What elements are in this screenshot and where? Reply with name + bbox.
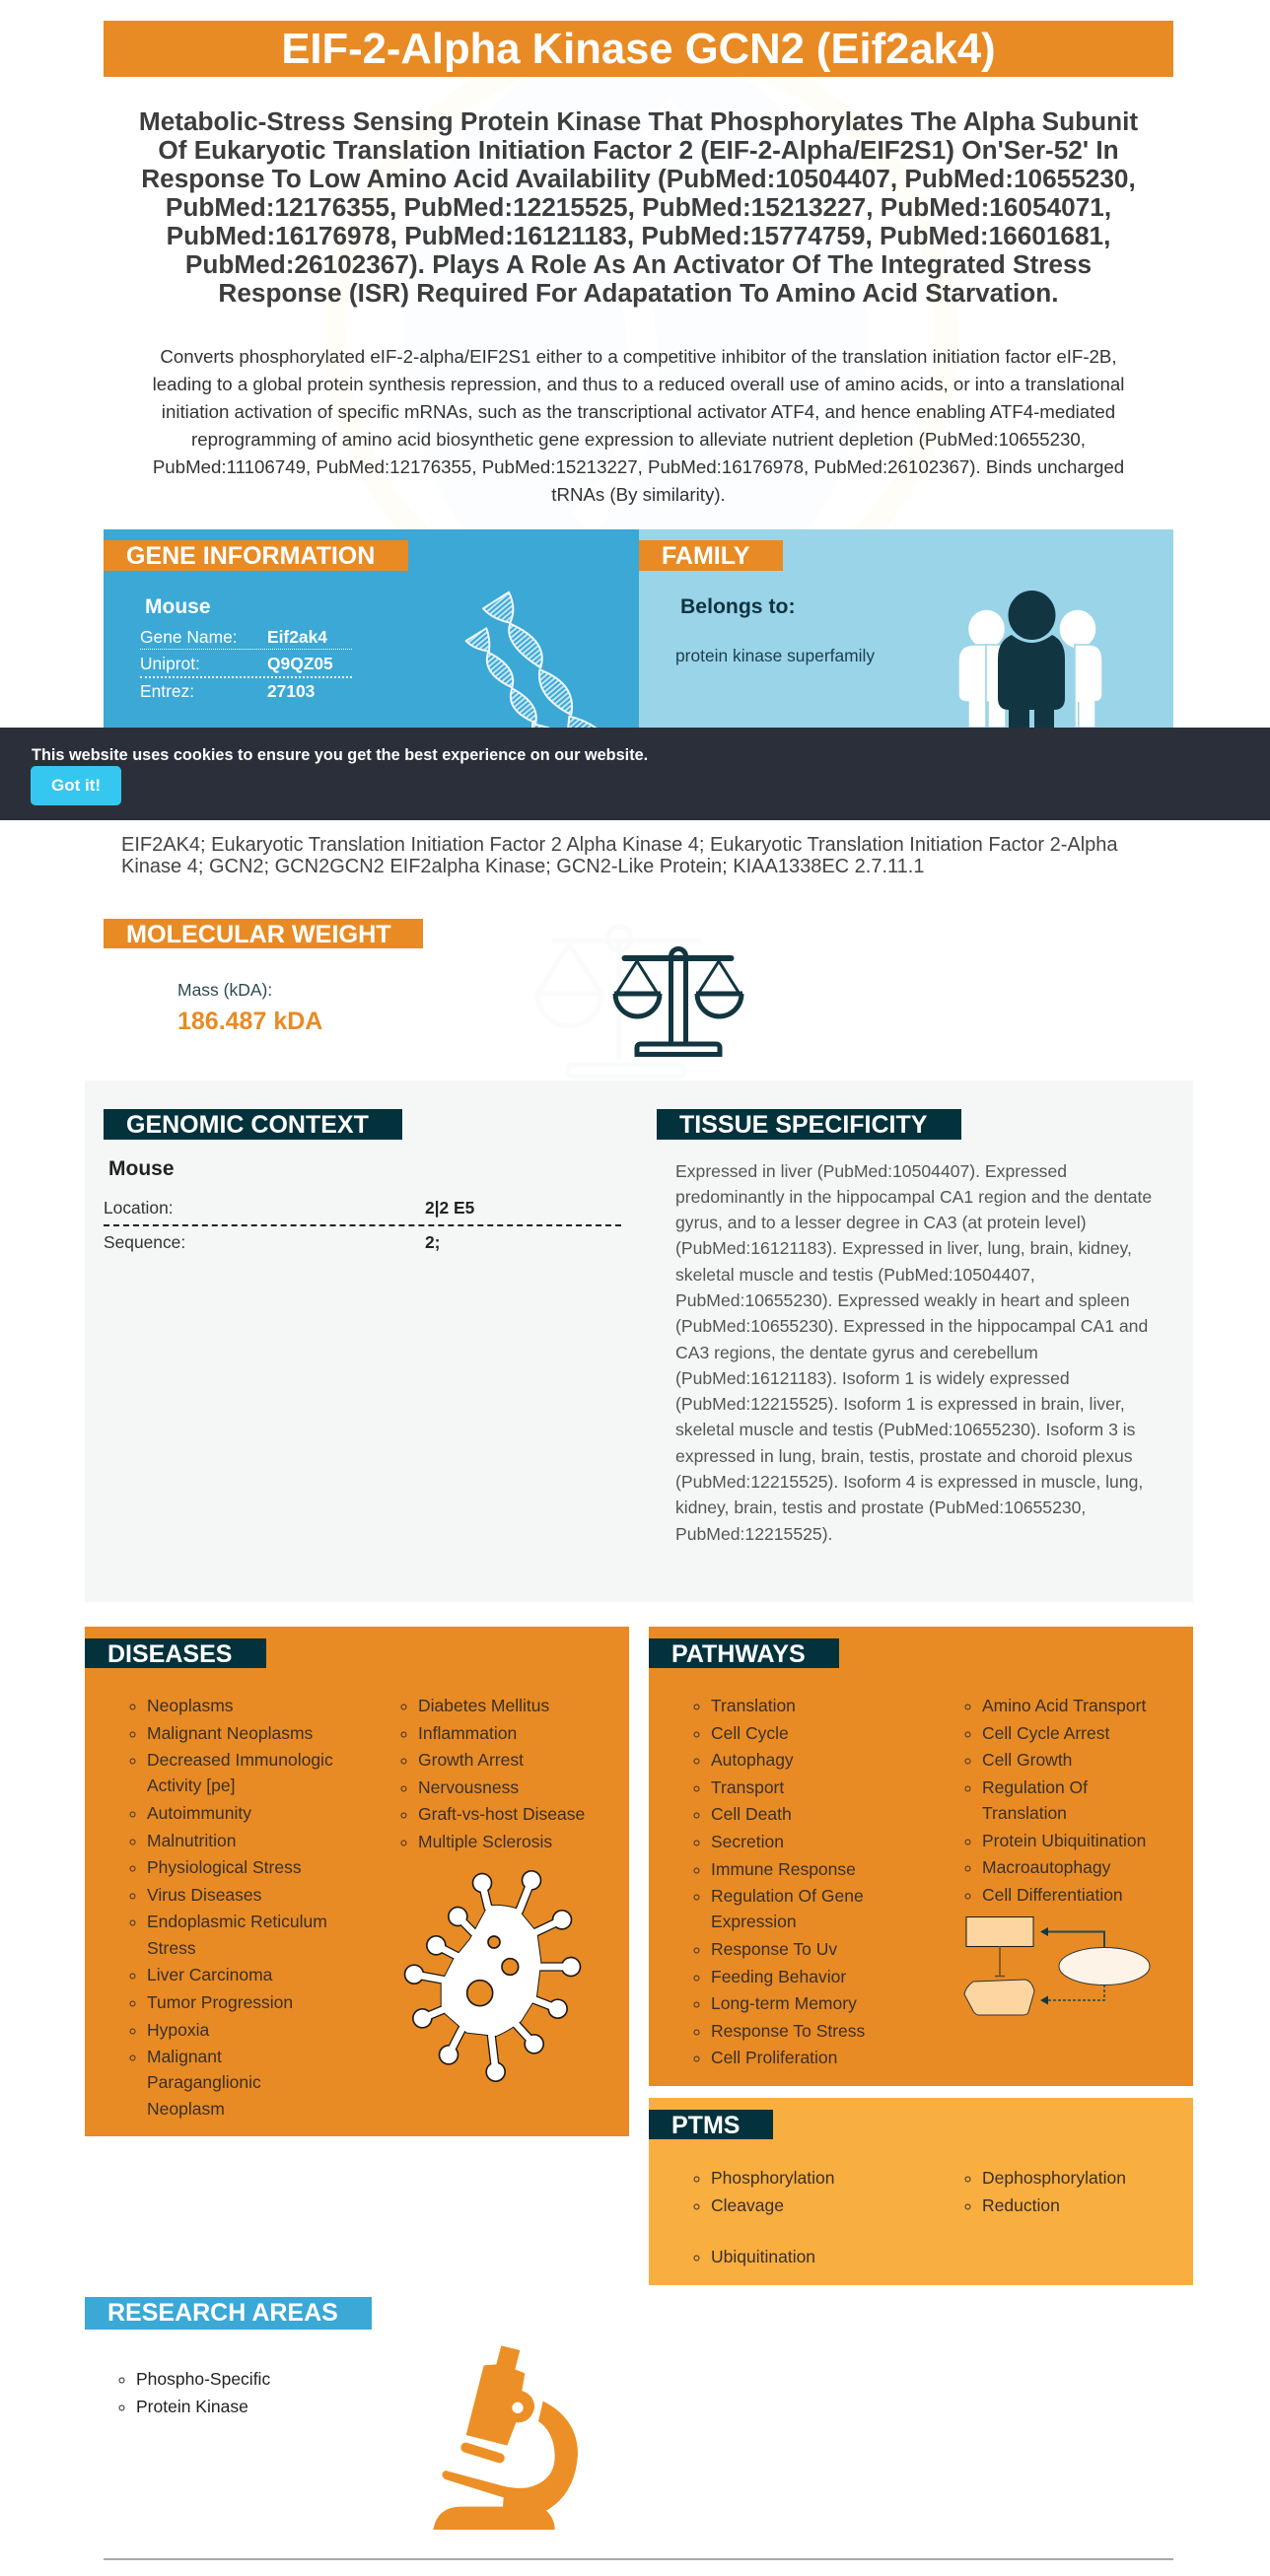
function paragraph: Converts phosphorylated eIF-2-alpha/EIF2S1 either to a competitive inhibitor of the translation initiation factor eIF-2B,	[160, 345, 1117, 367]
pathways list column 2: Macroautophagy	[982, 1857, 1110, 1877]
pathways list column 2: Translation	[982, 1803, 1067, 1823]
gene info table: Q9QZ05	[267, 654, 333, 673]
PTMs list column 1	[694, 2168, 834, 2266]
subtitle description: PubMed:12176355, PubMed:12215525, PubMed:15213227, PubMed:16054071,	[166, 191, 1111, 221]
pathways list column 1: Immune Response	[711, 1859, 856, 1879]
heading: gene information: GENE INFORMATION	[126, 542, 375, 570]
pathways list column 2: Regulation Of	[982, 1777, 1088, 1797]
heading: tissue specificity: TISSUE SPECIFICITY	[679, 1111, 927, 1139]
pathways list column 2	[964, 1696, 1146, 1905]
pathways list column 1: Regulation Of Gene	[711, 1886, 864, 1906]
subtitle description: Response To Low Amino Acid Availability (PubMed:10504407, PubMed:10655230,	[141, 164, 1136, 193]
diseases list column 2: Graft-vs-host Disease	[418, 1804, 585, 1824]
heading: pathways: PATHWAYS	[671, 1640, 806, 1668]
diseases list column 1: Decreased Immunologic	[147, 1750, 333, 1770]
pathways list column 2: Cell Growth	[982, 1750, 1072, 1770]
species label: Mouse	[145, 595, 211, 618]
pathways list column 1: Translation	[711, 1696, 796, 1715]
PTMs list column 2: Reduction	[982, 2195, 1060, 2215]
heading: diseases: DISEASES	[107, 1640, 232, 1668]
panel: pathways	[649, 1627, 1193, 2086]
pathways list column 1: Cell Proliferation	[711, 2048, 837, 2067]
tissue specificity text: CA3 regions, the dentate gyrus and cerebellum	[675, 1343, 1038, 1362]
diseases list column 1	[130, 1696, 333, 2119]
diseases list column 2: Multiple Sclerosis	[418, 1832, 552, 1851]
tissue specificity text: expressed in lung, brain, testis, prostate and choroid plexus	[675, 1446, 1133, 1466]
panel: genomic context and tissue specificity	[85, 1080, 1193, 1602]
pathways list column 1: Autophagy	[711, 1750, 794, 1770]
button: got it: Got it!	[51, 776, 101, 795]
subtitle description: PubMed:26102367). Plays A Role As An Activator Of The Integrated Stress	[185, 248, 1092, 278]
research areas list: Protein Kinase	[136, 2396, 248, 2415]
button: got it	[31, 766, 121, 805]
species label: Mouse	[108, 1157, 175, 1180]
family name: protein kinase superfamily	[675, 646, 875, 665]
diseases list column 1: Endoplasmic Reticulum	[147, 1912, 327, 1931]
function paragraph: reprogramming of amino acid biosynthetic gene expression to alleviate nutrient depletion (PubMed:10655230,	[191, 428, 1086, 450]
pathways list column 1: Cell Death	[711, 1804, 792, 1824]
icon: pathway diagram	[964, 1916, 1150, 2015]
pathways list column 1: Expression	[711, 1912, 797, 1931]
heading: molecular weight: MOLECULAR WEIGHT	[126, 921, 391, 948]
genomic table: 2;	[425, 1232, 440, 1252]
diseases list column 1: Tumor Progression	[147, 1992, 293, 2012]
diseases list column 1: Liver Carcinoma	[147, 1965, 272, 1984]
heading: research areas	[85, 2297, 372, 2330]
heading: family	[639, 540, 783, 571]
diseases list column 1: Neoplasms	[147, 1696, 234, 1715]
aliases text	[121, 834, 1118, 877]
panel: family	[639, 529, 1173, 728]
diseases list column 1: Autoimmunity	[147, 1803, 251, 1823]
pathways list column 2: Amino Acid Transport	[982, 1696, 1146, 1715]
icon: DNA helix	[465, 592, 598, 728]
diseases list column 2: Inflammation	[418, 1723, 517, 1743]
tissue specificity text: (PubMed:16121183). Isoform 1 is widely expressed	[675, 1368, 1070, 1388]
pathways list column 1	[694, 1696, 865, 2067]
gene info table	[140, 627, 352, 701]
pathways list column 2: Cell Differentiation	[982, 1885, 1123, 1905]
genomic table: 2|2 E5	[425, 1198, 474, 1218]
tissue specificity text: Expressed in liver (PubMed:10504407). Expressed	[675, 1161, 1067, 1181]
gene info table: Entrez:	[140, 681, 194, 701]
tissue specificity text: (PubMed:10655230). Expressed in the hippocampal CA1 and	[675, 1316, 1148, 1336]
diseases list column 1: Hypoxia	[147, 2020, 209, 2040]
research areas list	[118, 2368, 270, 2415]
genomic table: Location:	[104, 1198, 174, 1218]
title	[104, 21, 1173, 77]
tissue specificity text: predominantly in the hippocampal CA1 region and the dentate	[675, 1187, 1152, 1207]
pathways list column 1: Cell Cycle	[711, 1723, 789, 1743]
pathways list column 1: Response To Uv	[711, 1939, 837, 1959]
PTMs list column 2	[964, 2168, 1126, 2215]
subtitle description: Response (ISR) Required For Adapatation To Amino Acid Starvation.	[218, 278, 1059, 308]
gene info table: 27103	[267, 681, 315, 701]
pathways list column 1: Long-term Memory	[711, 1993, 857, 2013]
subtitle description: Of Eukaryotic Translation Initiation Factor 2 (EIF-2-Alpha/EIF2S1) On'Ser-52' In	[158, 134, 1119, 164]
diseases list column 1: Paraganglionic	[147, 2072, 261, 2092]
diseases list column 1: Stress	[147, 1938, 196, 1958]
subtitle description: Metabolic-Stress Sensing Protein Kinase That Phosphorylates The Alpha Subunit	[139, 106, 1138, 136]
icon: balance scales	[613, 946, 743, 1057]
tissue specificity text: skeletal muscle and testis (PubMed:10655230). Isoform 3 is	[675, 1420, 1135, 1439]
diseases list column 1: Neoplasm	[147, 2099, 225, 2119]
footer divider	[104, 2558, 1173, 2560]
heading: diseases	[85, 1638, 266, 1668]
heading: PTMS: PTMS	[671, 2112, 740, 2139]
PTMs list column 1: Cleavage	[711, 2195, 784, 2215]
heading: family: FAMILY	[662, 542, 749, 570]
panel: PTMs	[649, 2098, 1193, 2285]
icon: virus	[404, 1870, 582, 2082]
subtitle description	[139, 106, 1138, 308]
background watermark	[296, 77, 986, 540]
function paragraph: initiation activation of specific mRNAs, such as the transcriptional activator ATF4, and hence enabling ATF4-mediated	[162, 400, 1115, 422]
PTMs list column 2: Dephosphorylation	[982, 2168, 1126, 2188]
diseases list column 1: Activity [pe]	[147, 1775, 235, 1795]
genomic table	[104, 1198, 621, 1252]
tissue specificity text: skeletal muscle and testis (PubMed:10504407,	[675, 1265, 1035, 1285]
genomic table: Sequence:	[104, 1232, 185, 1252]
PTMs list column 1: Ubiquitination	[711, 2247, 815, 2266]
function paragraph	[153, 345, 1124, 505]
mass label: Mass (kDA):	[177, 980, 272, 1000]
tissue specificity text: gyrus, and to a lesser degree in CA3 (at protein level)	[675, 1213, 1087, 1232]
gene info table: Gene Name:	[140, 627, 238, 647]
pathways list column 1: Feeding Behavior	[711, 1967, 846, 1986]
cookie message: This website uses cookies to ensure you get the best experience on our website.	[32, 746, 648, 764]
diseases list column 1: Virus Diseases	[147, 1885, 261, 1905]
pathways list column 1: Secretion	[711, 1832, 784, 1851]
subtitle description: PubMed:16176978, PubMed:16121183, PubMed:15774759, PubMed:16601681,	[167, 221, 1110, 250]
panel: diseases	[85, 1627, 629, 2136]
heading: PTMS	[649, 2110, 773, 2139]
diseases list column 1: Malnutrition	[147, 1831, 236, 1850]
aliases text: EIF2AK4; Eukaryotic Translation Initiation Factor 2 Alpha Kinase 4; Eukaryotic Translation Initiation Factor 2-Alpha	[121, 834, 1118, 856]
cookie banner	[0, 728, 1270, 820]
tissue specificity text: (PubMed:12215525). Isoform 1 is expressed in brain, liver,	[675, 1394, 1125, 1414]
aliases text: Kinase 4; GCN2; GCN2GCN2 EIF2alpha Kinase; GCN2-Like Protein; KIAA1338EC 2.7.11.1	[121, 856, 924, 877]
diseases list column 2: Growth Arrest	[418, 1750, 524, 1770]
function paragraph: PubMed:11106749, PubMed:12176355, PubMed:15213227, PubMed:16176978, PubMed:26102367). Binds uncharged	[153, 455, 1124, 477]
diseases list column 2	[400, 1696, 585, 1851]
research areas list: Phospho-Specific	[136, 2368, 270, 2388]
PTMs list column 1: Phosphorylation	[711, 2168, 834, 2188]
tissue specificity text: kidney, brain, testis and prostate (PubMed:10655230,	[675, 1497, 1086, 1517]
gene info table: Eif2ak4	[267, 627, 327, 647]
title: EIF-2-Alpha Kinase GCN2 (Eif2ak4)	[281, 26, 996, 73]
function paragraph: leading to a global protein synthesis repression, and thus to a reduced overall use of amino acids, or into a translational	[153, 373, 1124, 394]
pathways list column 1: Transport	[711, 1777, 784, 1797]
panel: gene information	[104, 529, 639, 728]
pathways list column 1: Response To Stress	[711, 2021, 865, 2041]
pathways list column 2: Cell Cycle Arrest	[982, 1723, 1109, 1743]
diseases list column 1: Physiological Stress	[147, 1857, 302, 1877]
diseases list column 2: Diabetes Mellitus	[418, 1696, 549, 1715]
pathways list column 2: Protein Ubiquitination	[982, 1831, 1146, 1850]
tissue specificity text: PubMed:10655230). Expressed weakly in heart and spleen	[675, 1290, 1130, 1310]
heading: research areas: RESEARCH AREAS	[107, 2299, 338, 2327]
icon: group of people	[958, 591, 1102, 728]
tissue specificity text	[675, 1161, 1152, 1544]
function paragraph: tRNAs (By similarity).	[551, 483, 726, 505]
diseases list column 1: Malignant Neoplasms	[147, 1723, 313, 1743]
heading: pathways	[649, 1638, 839, 1668]
tissue specificity text: (PubMed:12215525). Isoform 4 is expressed in muscle, lung,	[675, 1472, 1143, 1492]
diseases list column 2: Nervousness	[418, 1777, 519, 1797]
tissue specificity text: PubMed:12215525).	[675, 1524, 832, 1544]
mass value: 186.487 kDA	[177, 1008, 322, 1035]
belongs to label: Belongs to:	[680, 595, 796, 618]
icon: microscope	[433, 2345, 578, 2530]
tissue specificity text: (PubMed:16121183). Expressed in liver, lung, brain, kidney,	[675, 1238, 1132, 1258]
heading: genomic context: GENOMIC CONTEXT	[126, 1111, 369, 1139]
gene info table: Uniprot:	[140, 654, 200, 673]
diseases list column 1: Malignant	[147, 2047, 222, 2066]
icon: faint scales watermark	[532, 922, 710, 1079]
